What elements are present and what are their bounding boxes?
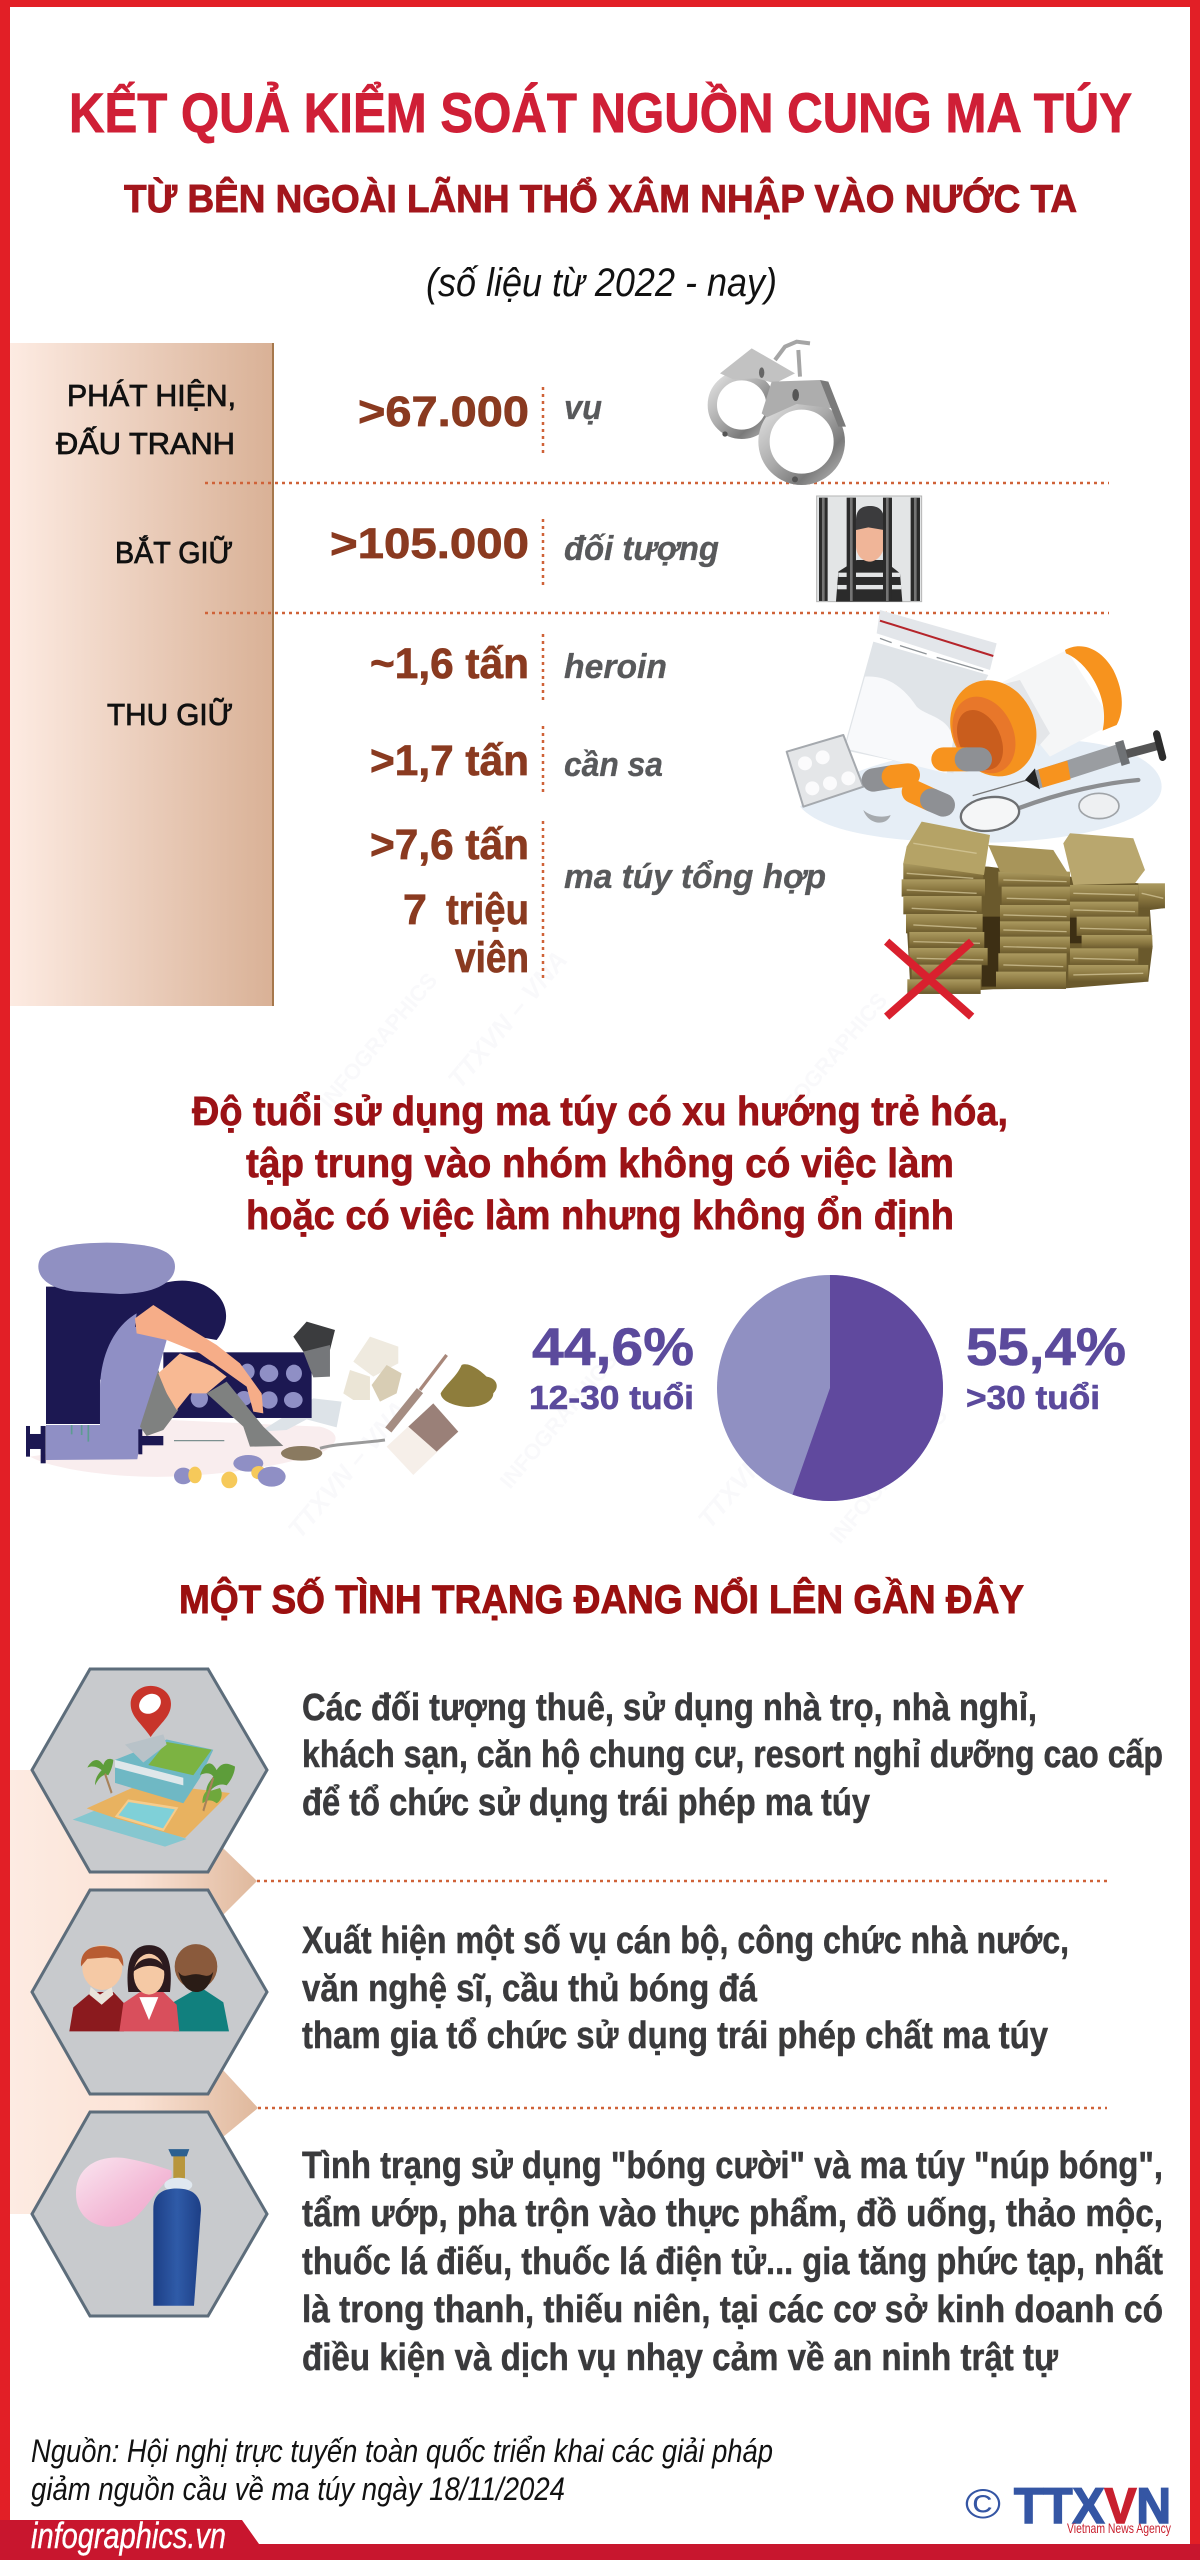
value: 67.000 cases: vụ [564,389,602,427]
heading: age trend [192,1088,1008,1238]
source note [31,2433,773,2507]
heading: age trend: Độ tuổi sử dụng ma túy có xu hướng trẻ hóa, [192,1088,1008,1134]
value: 105.000 suspects [330,520,719,568]
value: synthetic drugs: ma túy tổng hợp [564,858,826,896]
label: phát hiện, đấu tranh: PHÁT HIỆN, [67,378,236,413]
text: rented venues [302,1687,1163,1824]
value: cannabis: cần sa [564,746,663,784]
label: bắt giữ: BẮT GIỮ [115,534,233,570]
text: officials and artists: văn nghệ sĩ, cầu thủ bóng đá [302,1968,758,2010]
label: phát hiện, đấu tranh [56,378,236,461]
icon: handcuffs [712,342,846,482]
stat: 44,6 percent [529,1318,694,1416]
footer bar with site tab: infographics.vn [31,2515,226,2556]
icon: red cross [887,942,972,1017]
value: 67.000 cases: >67.000 [358,388,529,436]
label: thu giữ: THU GIỮ [107,697,233,732]
text: rented venues: để tổ chức sử dụng trái phép ma túy [302,1782,870,1824]
label: phát hiện, đấu tranh: ĐẤU TRANH [56,426,235,461]
illustration: person using drugs [26,1243,497,1488]
value: synthetic drugs: >7,6 tấn [370,821,529,869]
text: laughing gas trend: điều kiện và dịch vụ nhạy cảm về an ninh trật tự [302,2337,1058,2379]
icon: stacked drug bricks [902,822,1165,994]
text: INFOGRAPHICS [315,968,442,1113]
value: synthetic drugs: 7 [403,886,427,934]
heading: recent issues: MỘT SỐ TÌNH TRẠNG ĐANG NỔI LÊN GẦN ĐÂY [179,1575,1024,1622]
heading: age trend: tập trung vào nhóm không có việc làm [246,1140,954,1186]
value: heroin: ~1,6 tấn [370,640,529,688]
value: synthetic drugs [370,821,826,982]
text: laughing gas trend [302,2145,1163,2379]
text: TTXVN – VNA [692,1385,823,1534]
value: synthetic drugs: viên [455,934,529,982]
logo: TTXVN: © [965,2480,1001,2527]
date note: (số liệu từ 2022 - nay) [426,261,777,305]
source note: Nguồn: Hội nghị trực tuyến toàn quốc triển khai các giải pháp [31,2433,773,2469]
source note: giảm nguồn cầu về ma túy ngày 18/11/2024 [31,2471,565,2507]
value: heroin: heroin [564,648,667,686]
value: cannabis: >1,7 tấn [370,737,529,785]
stat: 55,4 percent: >30 tuổi [966,1379,1100,1416]
pie chart [717,1275,943,1501]
footer bar with site tab [0,2515,1200,2560]
icon: drugs, bottle, syringe and spoon [787,610,1163,843]
text: officials and artists: tham gia tổ chức sử dụng trái phép chất ma túy [302,2015,1048,2057]
text: officials and artists: Xuất hiện một số vụ cán bộ, công chức nhà nước, [302,1920,1069,1962]
hexagon icon: people [32,1890,267,2094]
value: 105.000 suspects: đối tượng [564,530,719,568]
stat: 55,4 percent: 55,4% [966,1318,1126,1377]
stat: 44,6 percent: 12-30 tuổi [529,1379,694,1416]
logo: TTXVN: TTXVN [1014,2478,1171,2534]
text: TTXVN – VNA [442,945,573,1094]
text: rented venues: Các đối tượng thuê, sử dụng nhà trọ, nhà nghỉ, [302,1687,1037,1729]
panel: results table [10,342,1165,1017]
icon: prisoner behind bars [817,496,922,602]
hexagon icon: resort [32,1669,267,1872]
text: INFOGRAPHICS [495,1348,622,1493]
stat: 55,4 percent [966,1318,1126,1416]
text: TTXVN – VNA [282,1395,413,1544]
text: INFOGRAPHICS [825,1403,952,1548]
text: INFOGRAPHICS [765,988,892,1133]
connector band with arrows [10,1770,258,2214]
category gradient column [10,343,274,1006]
heading: age trend: hoặc có việc làm nhưng không ổn định [246,1192,954,1238]
value: 105.000 suspects: >105.000 [330,520,529,568]
value: cannabis [370,737,663,785]
stat: 44,6 percent: 44,6% [532,1318,694,1377]
text: officials and artists [302,1920,1069,2057]
hexagon icon: laughing gas balloon [32,2112,267,2316]
value: heroin [370,640,667,688]
value: 67.000 cases [358,388,602,436]
value: synthetic drugs: triệu [446,886,529,934]
subtitle: TỪ BÊN NGOÀI LÃNH THỔ XÂM NHẬP VÀO NƯỚC TA [124,176,1077,221]
